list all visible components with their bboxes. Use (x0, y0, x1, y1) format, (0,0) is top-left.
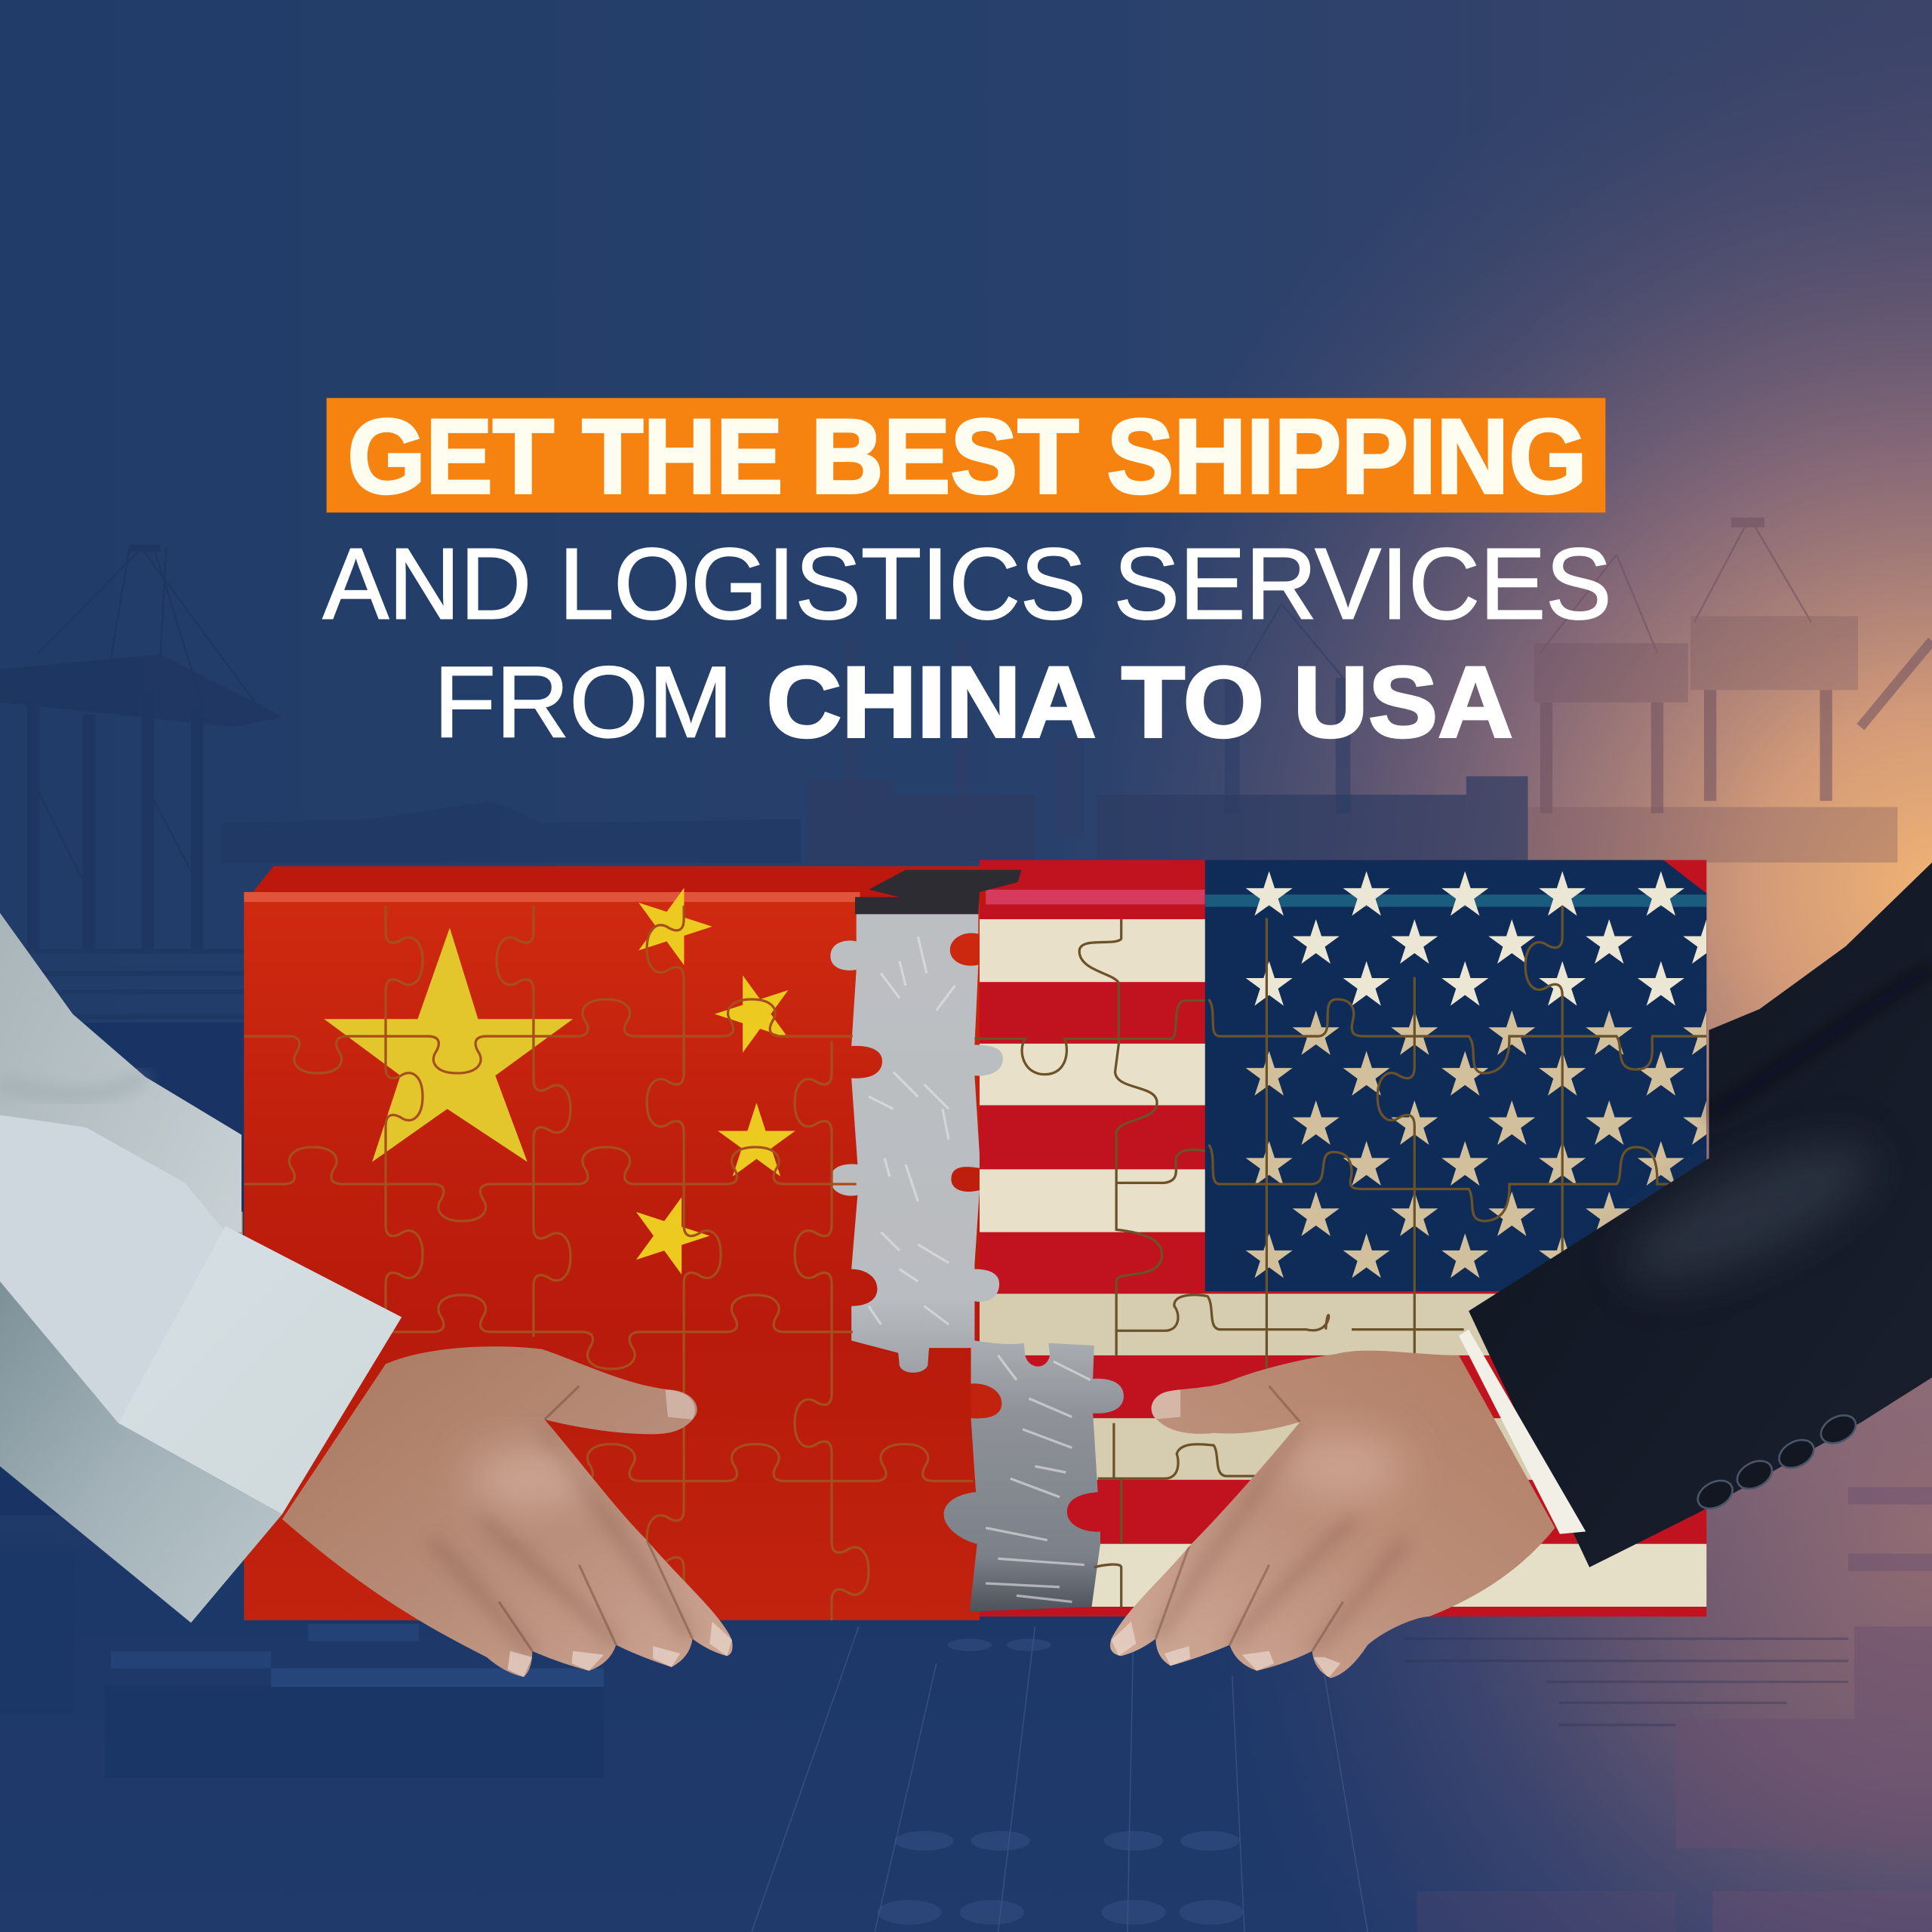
background: container yard (807, 777, 1527, 863)
China-side knob over lower gap (971, 1383, 1003, 1418)
puzzle seams: China side (244, 906, 974, 1620)
background: dock planks (1404, 1638, 1848, 1725)
USA flag canton (1205, 860, 1706, 1291)
jacket highlight (1608, 1117, 1890, 1310)
upper sleeve (0, 913, 242, 1423)
fingernails (1112, 1622, 1340, 1678)
box top edge (244, 866, 986, 906)
hand shading (431, 1386, 732, 1677)
headline (323, 397, 1612, 758)
right sleeve: dark jacket (1469, 863, 1932, 1567)
lower sleeve (0, 1281, 282, 1623)
puzzle box (244, 860, 1730, 1620)
silver gap scratches (869, 937, 1091, 1601)
background: right-side containers (1417, 1487, 1932, 1932)
hand shading (1112, 1386, 1404, 1678)
background: left dock structures (0, 1552, 604, 1778)
missing puzzle pieces: silver gap (830, 914, 1124, 1612)
USA flag stripes (980, 860, 1706, 1617)
China flag: small stars (622, 876, 802, 1279)
jacket cuff buttons (1693, 1410, 1860, 1514)
China flag: large star (324, 928, 573, 1162)
background: left quay lines (0, 951, 244, 1017)
background: left gantry crane (0, 549, 284, 949)
fingernails (508, 1622, 732, 1677)
middle sleeve (0, 1115, 226, 1423)
cuff panel (118, 1226, 401, 1515)
left sleeve: white shirt (0, 913, 401, 1623)
tan inner packing at box corner (226, 1211, 243, 1237)
background: right gantry cranes (1534, 518, 1932, 814)
headline line 1: GET THE BEST SHIPPING (347, 397, 1587, 515)
background: distant hills (222, 801, 801, 863)
left hand (282, 1346, 733, 1677)
background: floor markers (877, 1638, 1243, 1924)
right hand (1110, 1351, 1555, 1678)
headline line 3 bold: CHINA TO USA (767, 646, 1513, 758)
background: floor lane lines (752, 1626, 1367, 1932)
jacket crease (1709, 968, 1932, 1115)
orange banner (327, 398, 1605, 512)
sleeve fold shadow (0, 1077, 146, 1095)
background: dock floor (0, 1478, 1932, 1932)
torn dark edge at top of gap (855, 870, 1021, 914)
headline line 2: AND LOGISTICS SERVICES (323, 528, 1612, 641)
headline line 3 light: FROM (434, 646, 733, 758)
China flag face (244, 902, 980, 1620)
puzzle seams: USA side (974, 906, 1706, 1607)
background: centre cranes (851, 579, 1343, 838)
right shirt cuff (1459, 1330, 1586, 1534)
USA flag stars (1246, 871, 1730, 1278)
